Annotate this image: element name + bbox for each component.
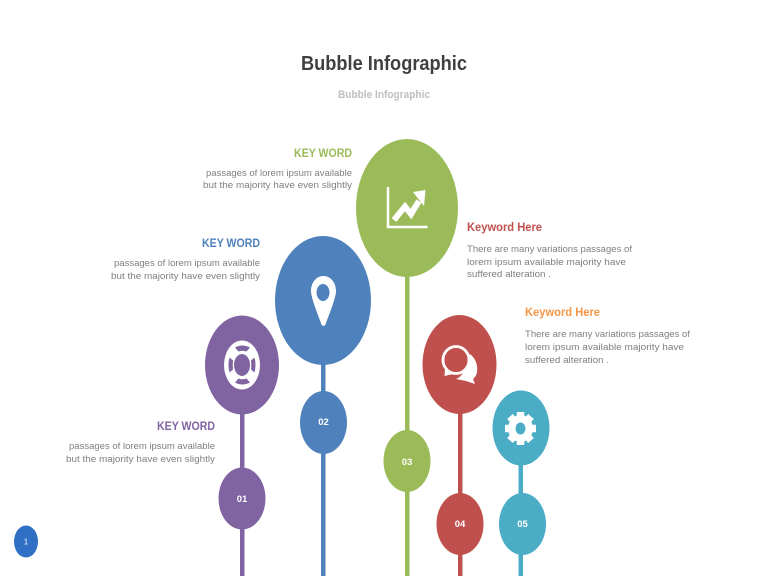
text block: orange keyword: suffered alteration . bbox=[525, 355, 609, 365]
text block: red keyword bbox=[467, 220, 633, 279]
number badge 02: 02 bbox=[318, 417, 329, 428]
text block: red keyword: suffered alteration . bbox=[467, 269, 551, 279]
text block: green key word: but the majority have even slightly bbox=[203, 180, 353, 190]
page number badge: 1 bbox=[24, 538, 29, 546]
page number badge bbox=[14, 526, 38, 558]
text block: red keyword: lorem ipsum available majority have bbox=[467, 257, 626, 267]
number badge 05 bbox=[499, 493, 546, 555]
text block: green key word: KEY WORD bbox=[294, 146, 352, 160]
teal balloon bbox=[492, 390, 550, 466]
icon: speech bubbles bbox=[443, 346, 477, 384]
text block: orange keyword: Keyword Here bbox=[525, 305, 600, 319]
subtitle: Bubble Infographic bbox=[338, 89, 430, 101]
title: Bubble Infographic bbox=[301, 53, 467, 75]
number badge 05: 05 bbox=[517, 519, 528, 530]
text block: blue key word: but the majority have even slightly bbox=[111, 271, 261, 281]
number badge 03 bbox=[384, 430, 430, 492]
text block: purple key word bbox=[66, 419, 216, 464]
blue balloon bbox=[275, 236, 371, 365]
red balloon bbox=[422, 315, 496, 414]
text block: blue key word bbox=[111, 236, 261, 281]
text block: purple key word: passages of lorem ipsum available bbox=[69, 441, 215, 451]
number badge 01: 01 bbox=[237, 494, 248, 505]
number badge 04 bbox=[436, 493, 484, 555]
bubble 01: purple stem bbox=[205, 316, 279, 576]
number badge 03: 03 bbox=[402, 457, 412, 468]
icon: gear bbox=[505, 412, 536, 445]
text block: green key word bbox=[203, 146, 353, 190]
icon: line chart bbox=[388, 187, 428, 227]
text block: orange keyword: There are many variations passages of bbox=[525, 329, 691, 339]
text block: blue key word: KEY WORD bbox=[202, 236, 260, 250]
number badge 02 bbox=[300, 391, 347, 454]
text block: green key word: passages of lorem ipsum available bbox=[206, 168, 352, 178]
number badge 04: 04 bbox=[455, 519, 466, 530]
icon: map pin bbox=[311, 276, 336, 326]
bubble 05: teal stem bbox=[492, 390, 550, 576]
icon: life ring bbox=[224, 340, 260, 390]
text block: blue key word: passages of lorem ipsum available bbox=[114, 258, 260, 268]
bubble 04: red stem bbox=[422, 315, 496, 576]
bubble 02: blue stem bbox=[275, 236, 371, 576]
number badge 01 bbox=[218, 468, 266, 530]
text block: orange keyword: lorem ipsum available majority have bbox=[525, 342, 684, 352]
purple balloon bbox=[205, 316, 279, 414]
green balloon bbox=[356, 139, 458, 277]
text block: red keyword: Keyword Here bbox=[467, 220, 542, 234]
text block: orange keyword bbox=[525, 305, 691, 365]
text block: red keyword: There are many variations passages of bbox=[467, 244, 633, 254]
bubble 03: green stem bbox=[356, 139, 458, 576]
text block: purple key word: KEY WORD bbox=[157, 419, 215, 433]
text block: purple key word: but the majority have even slightly bbox=[66, 454, 216, 464]
